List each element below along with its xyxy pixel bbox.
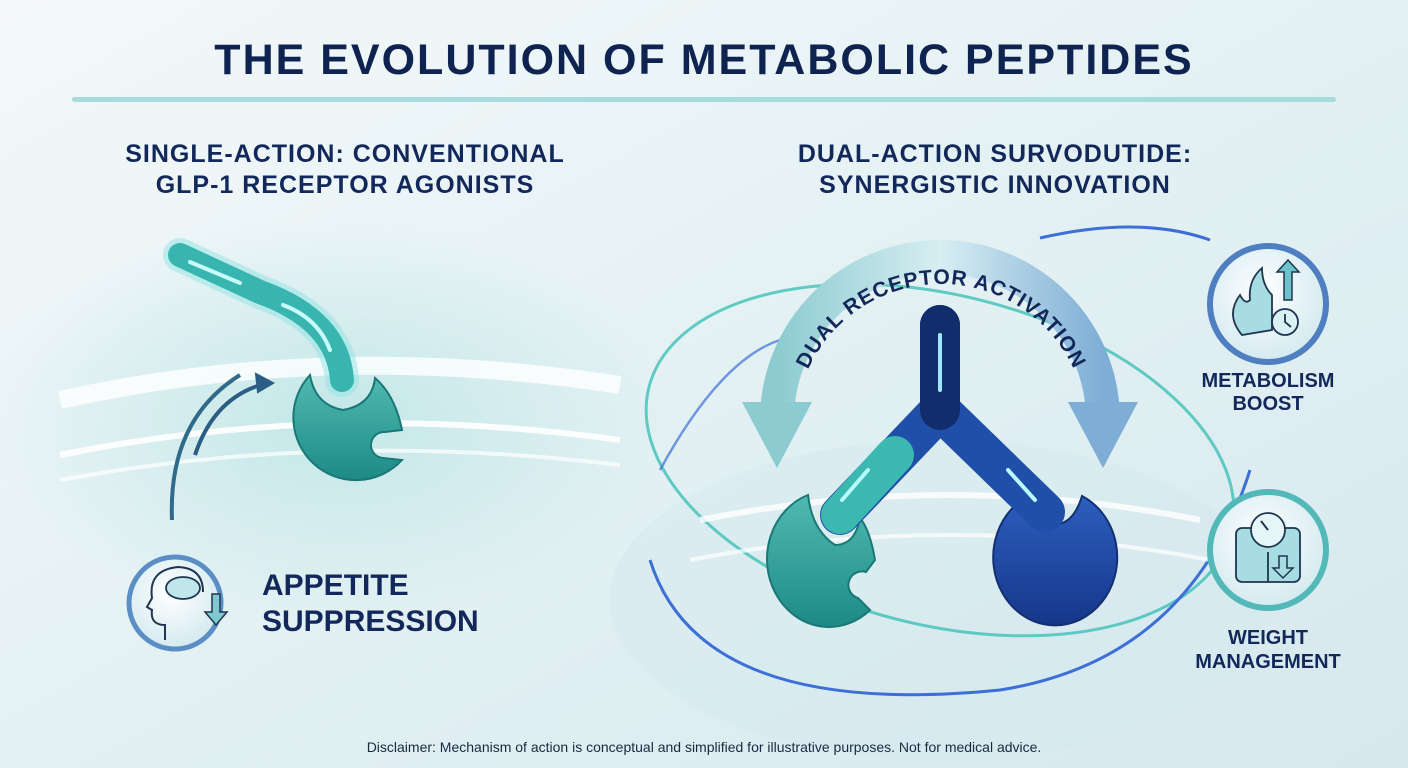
title: THE EVOLUTION OF METABOLIC PEPTIDES xyxy=(214,36,1194,84)
label: appetite suppression: SUPPRESSION xyxy=(262,605,479,638)
heading: single-action xyxy=(125,140,565,199)
teal receptor xyxy=(767,495,875,627)
heading: single-action: GLP-1 RECEPTOR AGONISTS xyxy=(156,171,534,199)
navy receptor xyxy=(993,492,1117,625)
right membrane xyxy=(690,495,1210,560)
label: weight management: MANAGEMENT xyxy=(1195,651,1341,673)
orbits xyxy=(609,227,1271,695)
icon: appetite suppression xyxy=(129,557,227,649)
label: metabolism boost: METABOLISM xyxy=(1202,370,1334,392)
disclaimer: Disclaimer: Mechanism of action is conceptual and simplified for illustrative purposes. Not for medical advice. xyxy=(367,739,1041,755)
label: appetite suppression xyxy=(262,569,479,638)
arrow: binding xyxy=(172,374,273,520)
left membrane xyxy=(60,366,620,480)
label: weight management xyxy=(1195,627,1341,673)
label: weight management: WEIGHT xyxy=(1228,627,1308,649)
label: metabolism boost: BOOST xyxy=(1232,393,1304,415)
label: appetite suppression: APPETITE xyxy=(262,569,409,602)
receptor xyxy=(293,375,402,480)
left illustration: peptide binding receptor xyxy=(180,255,402,480)
arrow: dual receptor activation xyxy=(742,240,1138,468)
heading: dual-action: SYNERGISTIC INNOVATION xyxy=(819,171,1171,199)
Y peptide xyxy=(840,325,940,515)
peptide xyxy=(180,255,342,380)
label: metabolism boost xyxy=(1202,370,1334,415)
heading: dual-action: DUAL-ACTION SURVODUTIDE: xyxy=(798,140,1192,168)
heading: dual-action xyxy=(798,140,1192,199)
heading: single-action: SINGLE-ACTION: CONVENTIONAL xyxy=(125,140,565,168)
dual receptors and Y peptide xyxy=(767,325,1117,627)
arrow: dual receptor activation: DUAL RECEPTOR ACTIVATION xyxy=(796,269,1086,368)
icon: weight management xyxy=(1210,492,1326,608)
icon: metabolism boost xyxy=(1210,246,1326,362)
